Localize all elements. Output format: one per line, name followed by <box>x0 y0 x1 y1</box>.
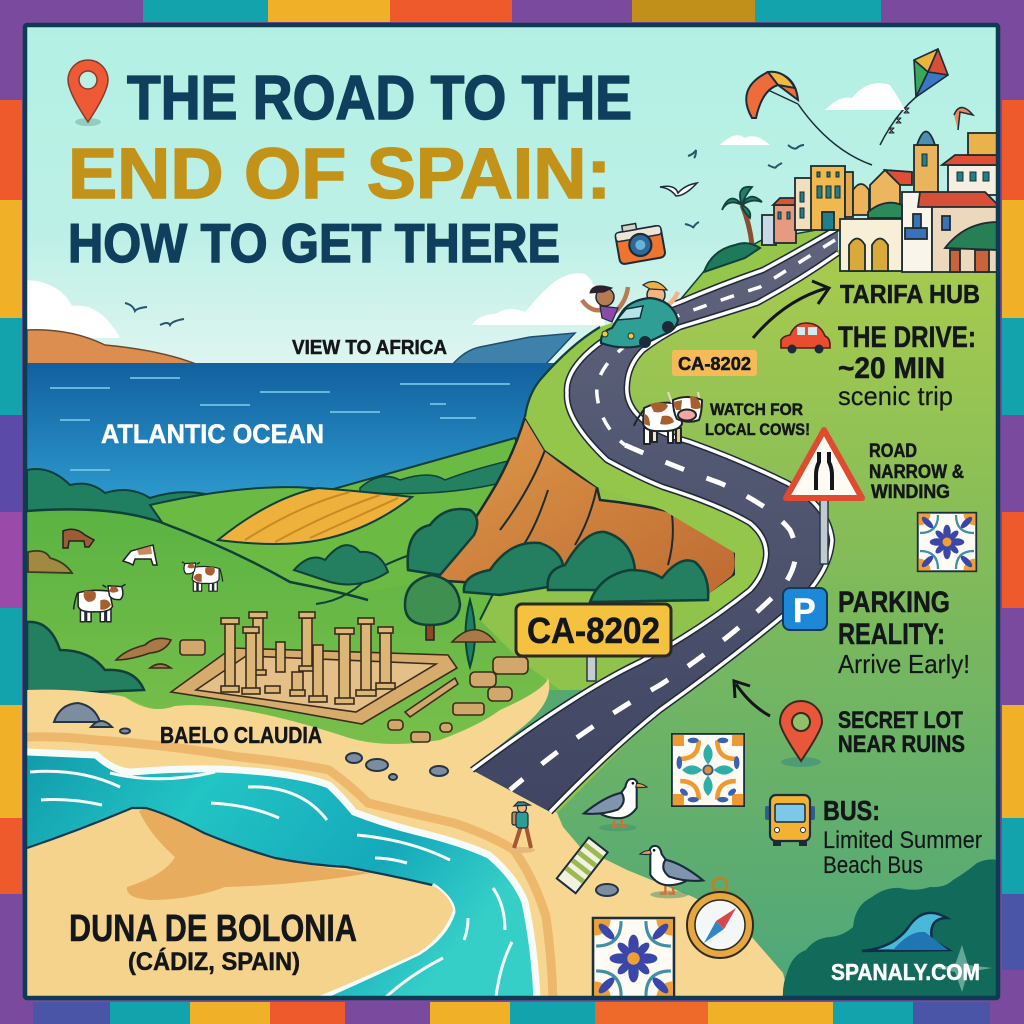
diamond kite <box>880 49 948 145</box>
title heading: END OF SPAIN: <box>68 135 611 214</box>
text: secret lot: NEAR RUINS <box>838 731 965 758</box>
town on the hill <box>762 132 998 272</box>
logo panel: SPANALY.COM <box>831 959 980 985</box>
text: bus <box>823 795 982 879</box>
icon: compass <box>687 878 753 958</box>
label: baelo claudia: BAELO CLAUDIA <box>160 722 322 748</box>
warning road sign <box>786 430 862 564</box>
hill strip above cliff and road <box>525 226 838 612</box>
power kite <box>746 72 872 165</box>
sand beach <box>27 678 790 1000</box>
arrow to Tarifa <box>753 281 829 338</box>
right clouds <box>472 273 605 325</box>
olive mound <box>28 551 72 573</box>
tile middle <box>672 734 744 806</box>
text: watch for cows <box>705 400 810 439</box>
ocean <box>27 363 554 497</box>
back hills and tree line <box>27 438 540 620</box>
white cow <box>123 545 157 565</box>
arrow to ruins lot <box>734 681 770 716</box>
text: the drive <box>838 321 976 411</box>
text: road narrow: ROAD <box>869 441 917 462</box>
left clouds <box>27 280 120 338</box>
green hill left <box>27 510 560 744</box>
car with travellers <box>582 281 678 348</box>
text: parking reality: Arrive Early! <box>838 649 970 679</box>
text: watch for cows: LOCAL COWS! <box>705 420 810 439</box>
sky clouds <box>720 83 905 145</box>
beach hiker <box>509 802 535 853</box>
seagull lower <box>640 846 703 898</box>
text: road narrow: WINDING <box>871 482 950 503</box>
text: the drive: THE DRIVE: <box>838 321 976 354</box>
seagull upper <box>584 779 647 831</box>
text: parking reality <box>838 586 970 679</box>
road <box>472 228 838 812</box>
hill ridge line <box>525 327 600 417</box>
title heading: HOW TO GET THERE <box>68 212 560 274</box>
right green hillside <box>557 250 998 1000</box>
cypress <box>466 600 475 667</box>
icon: parking <box>783 588 827 630</box>
label: Tarifa Hub: TARIFA HUB <box>840 279 980 309</box>
label: duna de bolonia: (CÁDIZ, SPAIN) <box>128 947 300 976</box>
text: the drive: scenic trip <box>838 381 953 411</box>
lower hill contour <box>316 555 410 604</box>
text: watch for cows: WATCH FOR <box>710 400 803 419</box>
scattered stones <box>116 630 528 742</box>
top hill ridge <box>680 230 817 298</box>
text: parking reality: PARKING <box>838 586 950 619</box>
brown cow <box>63 529 94 548</box>
title heading <box>68 64 632 274</box>
text: bus: Beach Bus <box>823 852 923 879</box>
text: bus: BUS: <box>823 795 880 826</box>
text: the drive: ~20 MIN <box>838 352 945 385</box>
icon: camera <box>614 219 666 265</box>
icon: parking: P <box>793 592 816 630</box>
label: view to africa: VIEW TO AFRICA <box>292 337 447 359</box>
text: road narrow: NARROW & <box>869 462 964 483</box>
kites <box>746 49 973 165</box>
palm tree <box>704 187 762 272</box>
tile bottom <box>593 918 674 999</box>
ruins of Baelo Claudia <box>171 612 457 724</box>
icon: location pin <box>780 701 822 767</box>
icon: bus <box>765 795 815 846</box>
road tag: CA-8202: CA-8202 <box>678 354 751 374</box>
beach rocks <box>54 703 618 896</box>
grazing cows <box>63 529 223 622</box>
label: duna de bolonia: DUNA DE BOLONIA <box>69 908 357 950</box>
text: road narrow <box>869 441 964 503</box>
text: secret lot: SECRET LOT <box>838 707 963 734</box>
hill outline <box>27 509 368 600</box>
text: secret lot <box>838 707 965 758</box>
tile upper right <box>918 513 976 571</box>
far headland <box>27 330 196 364</box>
road tag: CA-8202 <box>672 350 757 376</box>
road sign: CA-8202: CA-8202 <box>527 610 660 651</box>
tree <box>405 575 460 640</box>
label: duna de bolonia <box>69 908 357 976</box>
wet sand band <box>27 737 553 1000</box>
teal roadside grass <box>496 690 582 748</box>
cliff rock lines <box>500 450 673 565</box>
front dune <box>27 808 453 1000</box>
label: atlantic ocean: ATLANTIC OCEAN <box>101 419 324 449</box>
yellow farm field <box>218 488 412 544</box>
bushes at cliff base <box>27 509 708 695</box>
road sign: CA-8202 <box>516 604 671 681</box>
beach towel <box>557 838 608 893</box>
small kite <box>954 108 973 130</box>
icon: title pin <box>68 60 108 126</box>
breaking water <box>27 750 539 1000</box>
logo panel <box>783 859 998 1000</box>
icon: red car <box>781 323 830 354</box>
spotted cow <box>182 562 223 591</box>
title heading: THE ROAD TO THE <box>127 64 632 133</box>
distant blue hills <box>452 333 575 365</box>
text: parking reality: REALITY: <box>838 618 945 651</box>
text: bus: Limited Summer <box>823 827 982 854</box>
wave foam <box>27 752 537 1000</box>
large cow <box>74 584 125 622</box>
seagull in flight <box>660 183 697 196</box>
bushes in field <box>294 545 388 584</box>
cliff <box>430 417 736 597</box>
birds <box>125 145 804 325</box>
icon: roadside cow <box>634 392 702 444</box>
